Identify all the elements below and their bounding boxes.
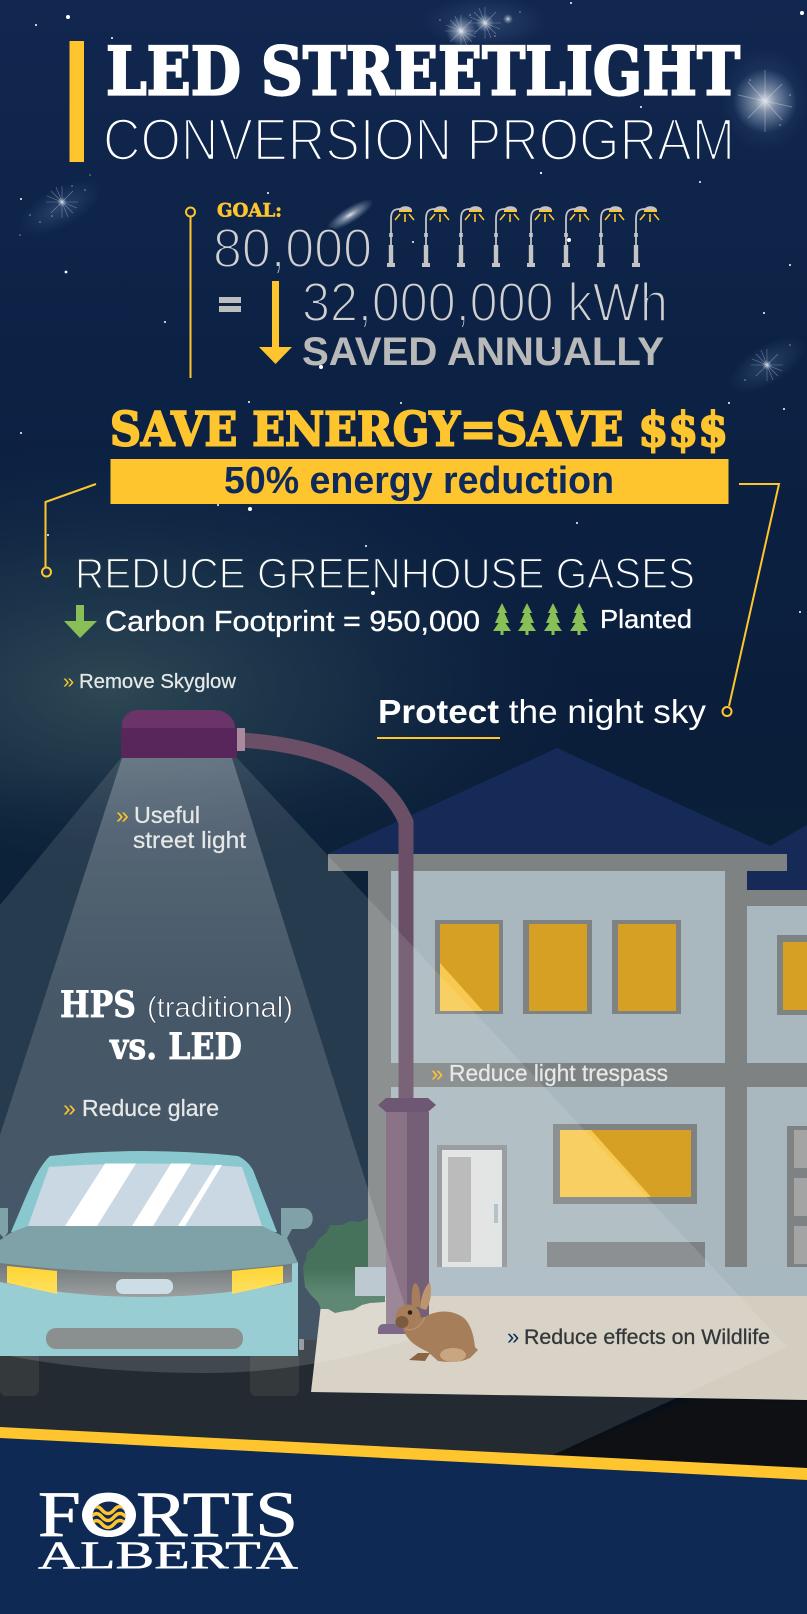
- road dark corner: [553, 1400, 807, 1470]
- icon: trees: [493, 603, 588, 635]
- label: reduce light trespass: Reduce light trespass: [449, 1060, 668, 1086]
- emblem: [116, 1279, 173, 1294]
- arm and post: [240, 740, 406, 1100]
- arrow down: [259, 281, 292, 364]
- car: [0, 1151, 313, 1356]
- house: [328, 748, 807, 1296]
- icon: street lamps: [387, 206, 659, 267]
- windshield glass: [28, 1164, 262, 1226]
- lower intake: [46, 1328, 243, 1349]
- headlights: [7, 1266, 283, 1294]
- label: reduce glare: »: [63, 1095, 76, 1121]
- label: remove skyglow: »: [63, 671, 74, 693]
- sidewalk: [311, 1296, 807, 1400]
- ears: [412, 1282, 431, 1310]
- 80,000: 80,000: [213, 217, 372, 279]
- post collar: [378, 1098, 436, 1112]
- connector left: [42, 484, 96, 576]
- body: [403, 1312, 478, 1362]
- right lower window: [787, 1126, 807, 1267]
- mirrors: [0, 1208, 313, 1240]
- label: useful street light: Useful: [134, 802, 200, 828]
- label: remove skyglow: Remove Skyglow: [79, 671, 236, 693]
- haunch: [440, 1348, 466, 1362]
- label: useful street light: »: [116, 802, 129, 828]
- side marker: [299, 1339, 304, 1350]
- street light: [121, 710, 436, 1334]
- reduce greenhouse gases: REDUCE GREENHOUSE GASES: [75, 550, 695, 598]
- post base: [378, 1112, 429, 1334]
- banner: 50% energy reduction: 50% energy reduction: [224, 460, 614, 502]
- lamp connector: [236, 728, 245, 751]
- collar fur: [405, 1317, 425, 1330]
- title: [103, 32, 740, 173]
- eye: [408, 1310, 412, 1315]
- connector right: [722, 484, 779, 716]
- outer light cone: [0, 758, 787, 1455]
- goal section: [186, 200, 668, 378]
- door: [437, 1145, 507, 1267]
- hood: [0, 1226, 298, 1272]
- goal label: GOAL:: [217, 200, 282, 222]
- heading: HPS vs LED: (traditional): [147, 992, 293, 1024]
- label: reduce effects on wildlife: Reduce effects on Wildlife: [524, 1325, 770, 1349]
- reflections: [65, 1164, 222, 1226]
- carbon footprint row: [64, 603, 692, 638]
- rabbit: [396, 1282, 478, 1362]
- front foot: [409, 1353, 430, 1361]
- heading: HPS vs LED: [60, 984, 293, 1068]
- bush: [303, 1218, 385, 1313]
- label: reduce glare: Reduce glare: [82, 1095, 219, 1121]
- road: [0, 1340, 807, 1480]
- banner: 50% energy reduction: [110, 459, 728, 504]
- wheels: [0, 1350, 299, 1396]
- kWh figure: 32,000,000 kWh: [302, 271, 668, 333]
- lamp head: [121, 710, 237, 758]
- head: [396, 1304, 420, 1330]
- planted: Planted: [600, 604, 692, 634]
- lower window: [553, 1124, 697, 1204]
- windshield frame: [11, 1151, 277, 1232]
- muzzle: [396, 1316, 408, 1328]
- foundation: [355, 1267, 807, 1296]
- logo: Fortis Alberta: FORTIS: [38, 1479, 298, 1551]
- label: reduce light trespass: »: [431, 1061, 443, 1086]
- logo: Fortis Alberta: [38, 1492, 298, 1569]
- roof: [329, 748, 807, 890]
- body: [0, 1262, 298, 1356]
- icon: green arrow: [64, 605, 97, 638]
- headline: save energy: SAVE ENERGY=SAVE $$$: [110, 402, 728, 458]
- grille: [0, 1262, 292, 1297]
- title accent bar: [70, 41, 84, 162]
- label: useful street light: street light: [133, 827, 247, 853]
- eave: [328, 854, 787, 871]
- heading: HPS vs LED: vs. LED: [109, 1026, 242, 1068]
- carbon text: Carbon Footprint = 950,000: [105, 606, 480, 638]
- label: useful street light: [116, 802, 247, 853]
- equals sign: [219, 297, 241, 312]
- inner light cone: [0, 758, 415, 1373]
- title: CONVERSION PROGRAM: [103, 107, 735, 173]
- saved annually: SAVED ANNUALLY: [302, 330, 664, 374]
- footer: [0, 1427, 807, 1614]
- walls: [368, 871, 747, 1267]
- logo waves: [82, 1493, 136, 1537]
- label: reduce effects on wildlife: »: [507, 1324, 519, 1349]
- yellow stripe: [0, 1427, 807, 1480]
- logo: Fortis Alberta: ALBERTA: [38, 1534, 298, 1577]
- connector line: [186, 208, 195, 378]
- heading: HPS vs LED: HPS: [60, 984, 136, 1026]
- protect the night sky: Protect the night sky: [378, 693, 707, 730]
- upper windows: [435, 920, 807, 1015]
